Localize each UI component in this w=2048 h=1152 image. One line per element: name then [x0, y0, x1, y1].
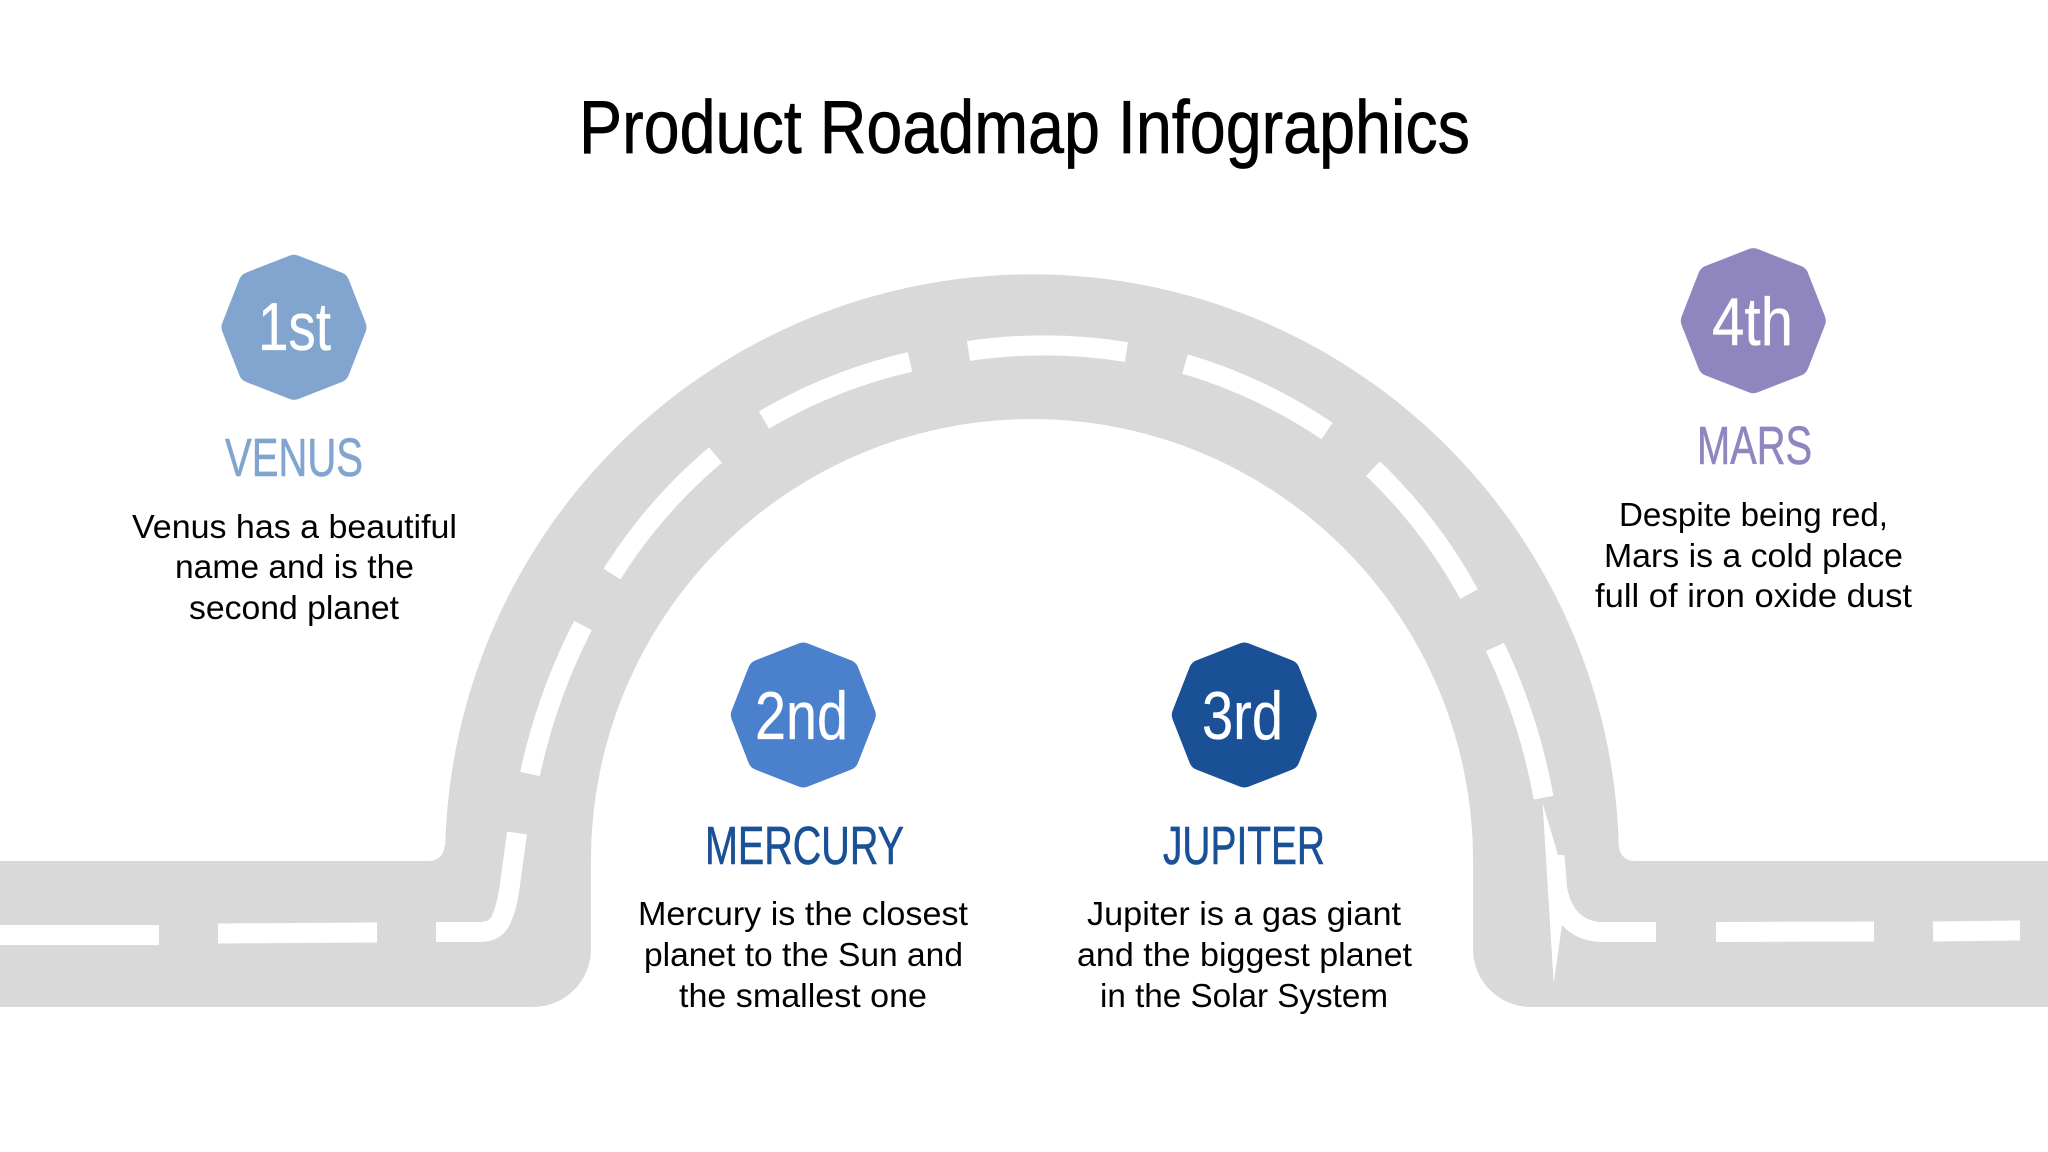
- text: Mercury description: [638, 896, 969, 1015]
- text: Mercury description: planet to the Sun and: [644, 937, 963, 974]
- text: Mercury description: the smallest one: [679, 978, 927, 1015]
- road surface: [0, 274, 2048, 1007]
- panel: Jupiter: [1077, 654, 1413, 1015]
- panel: Mercury: [638, 654, 969, 1015]
- text: Jupiter description: and the biggest planet: [1077, 937, 1413, 974]
- heading: Venus: VENUS: [225, 428, 363, 488]
- text: Mercury description: Mercury is the closest: [638, 896, 969, 933]
- text: Venus description: second planet: [189, 590, 400, 627]
- text: Jupiter description: in the Solar System: [1100, 978, 1388, 1015]
- text: Venus description: name and is the: [175, 549, 414, 586]
- heading: Mars: MARS: [1697, 416, 1812, 476]
- text: Mars description: Despite being red,: [1619, 497, 1888, 534]
- text: Venus description: Venus has a beautiful: [132, 509, 457, 546]
- badge: 2nd: [743, 654, 864, 776]
- badge: 3rd: 3rd: [1202, 678, 1283, 754]
- badge: 3rd: [1184, 654, 1305, 776]
- badge: 1st: 1st: [258, 289, 331, 365]
- text: Mars description: Mars is a cold place: [1604, 538, 1903, 575]
- text: Mars description: [1595, 497, 1913, 615]
- broken lane sliver at right bend: [1543, 803, 1656, 983]
- road arch with lane markings: [0, 274, 2048, 1007]
- heading: Jupiter: JUPITER: [1163, 816, 1325, 876]
- badge: 4th: 4th: [1712, 284, 1793, 360]
- panel: Venus: [132, 267, 457, 627]
- badge: 2nd: 2nd: [755, 678, 848, 754]
- badge: 4th: [1693, 260, 1814, 381]
- lane markings: [0, 345, 2020, 935]
- title: Product Roadmap Infographics: [579, 85, 1470, 169]
- text: Jupiter description: [1077, 896, 1413, 1015]
- text: Jupiter description: Jupiter is a gas giant: [1087, 896, 1402, 933]
- panel: Mars: [1595, 260, 1913, 615]
- text: Mars description: full of iron oxide dust: [1595, 578, 1913, 615]
- heading: Mercury: MERCURY: [705, 816, 904, 876]
- badge: 1st: [234, 267, 354, 388]
- text: Venus description: [132, 509, 457, 627]
